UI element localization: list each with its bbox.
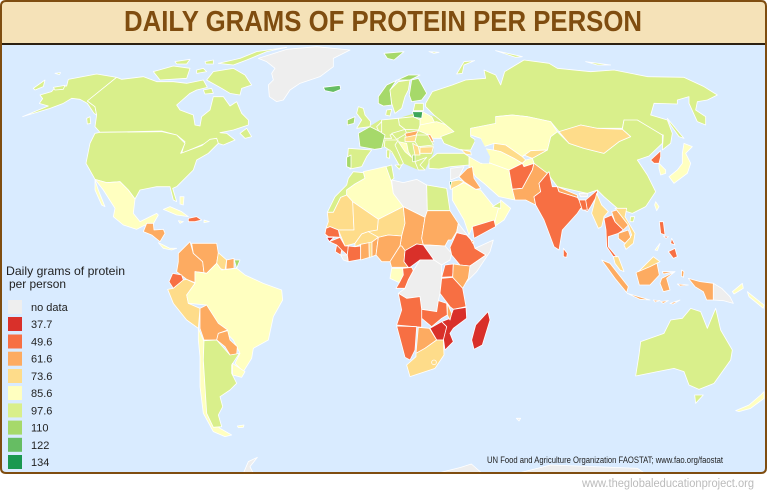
website credit: www.theglobaleducationproject.org (581, 478, 754, 490)
legend: 85.6 (31, 388, 52, 400)
legend: 122 (31, 440, 49, 452)
source note: UN Food and Agriculture Organization FAOSTAT; www.fao.org/faostat (487, 455, 723, 465)
legend: 134 (31, 457, 49, 469)
map: Africa (325, 165, 493, 377)
map: South America (168, 242, 283, 473)
legend: 49.6 (31, 336, 52, 348)
legend (6, 264, 125, 469)
map: Southeast Asia (563, 193, 733, 304)
map: Oceania and Antarctica (431, 283, 764, 475)
title bar (1, 1, 766, 44)
title: DAILY GRAMS OF PROTEIN PER PERSON (124, 6, 642, 38)
map: Asia and Russia (384, 51, 717, 250)
legend: 97.6 (31, 405, 52, 417)
legend title: per person (9, 277, 66, 291)
legend: 61.6 (31, 354, 52, 366)
legend title: Daily grams of protein (6, 264, 125, 278)
legend: 37.7 (31, 319, 52, 331)
map: North America and Greenland (23, 47, 350, 250)
map: Europe (347, 75, 455, 170)
legend: 73.6 (31, 371, 52, 383)
legend title (6, 264, 125, 291)
legend: 110 (31, 423, 49, 435)
legend: no data (31, 302, 69, 314)
